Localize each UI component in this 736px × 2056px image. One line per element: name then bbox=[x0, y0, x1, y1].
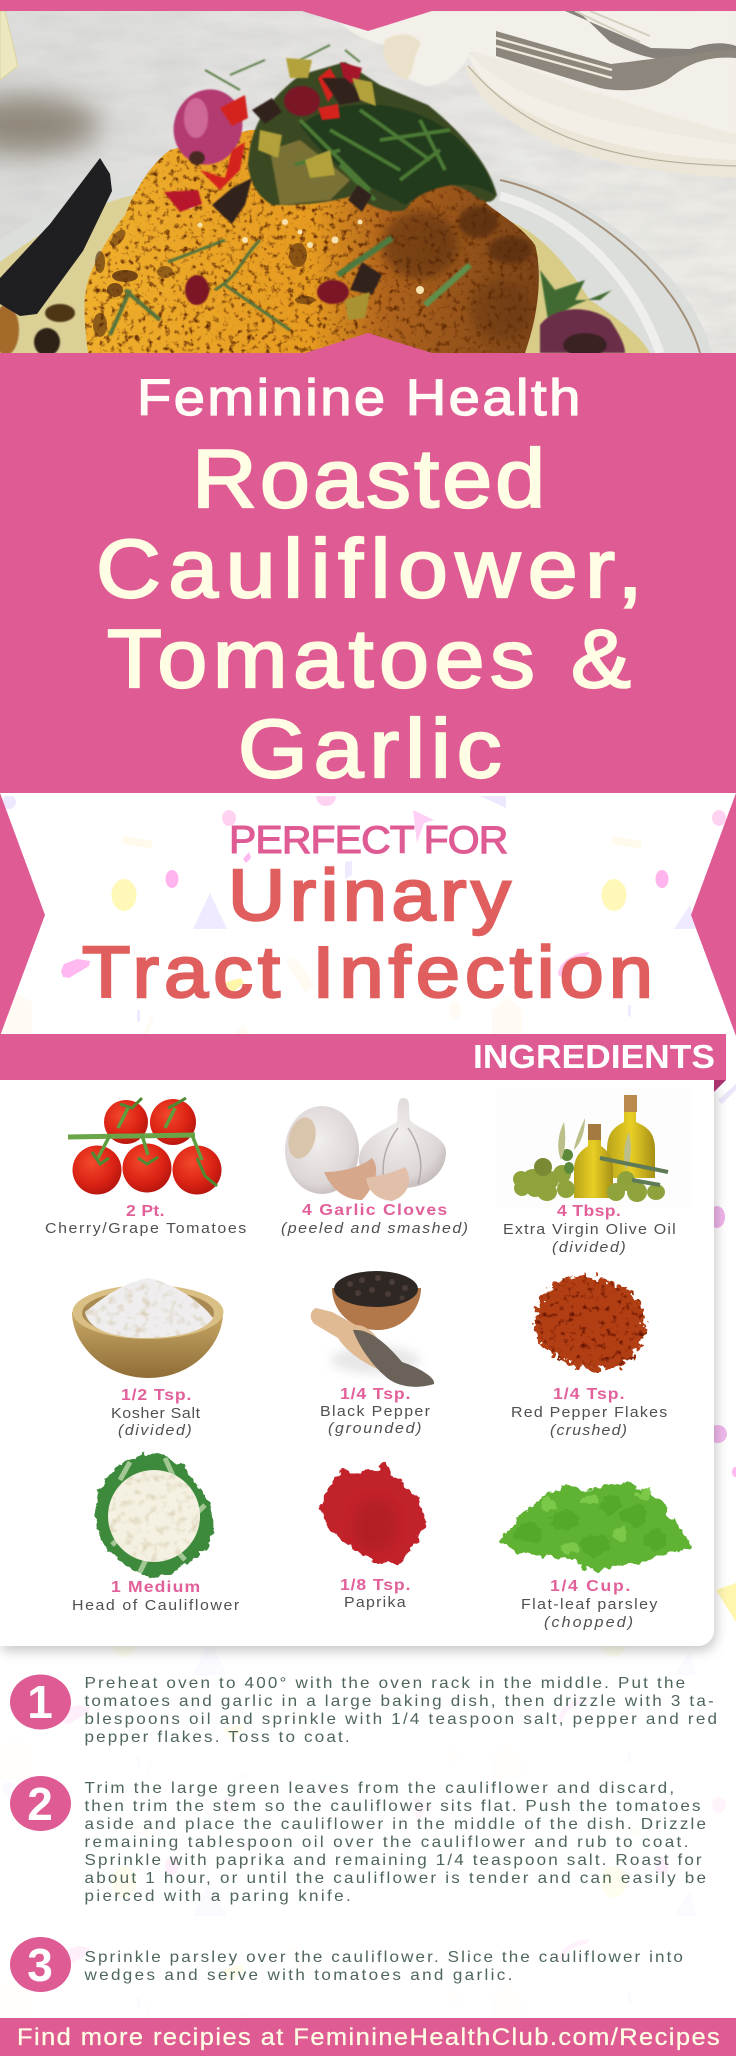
ingredients card bbox=[0, 1080, 714, 1646]
step 2 text: pierced with a paring knife. bbox=[84, 1888, 351, 1905]
red tomato and pomegranate pieces bbox=[164, 62, 362, 305]
icon: tomatoes bbox=[68, 1098, 222, 1194]
ingredient: black pepper: (grounded) bbox=[328, 1421, 422, 1437]
top pink band with notch bbox=[0, 0, 736, 31]
knife bbox=[0, 158, 112, 316]
icon: olive oil bottles and olives bbox=[497, 1088, 692, 1208]
title panel bbox=[0, 333, 736, 795]
ingredient: olive oil: (divided) bbox=[552, 1240, 626, 1256]
step number 3 bbox=[10, 1937, 71, 1992]
ingredient: kosher salt: (divided) bbox=[118, 1423, 192, 1439]
step 2 bbox=[10, 1776, 706, 1905]
ingredient: olive oil: Extra Virgin Olive Oil bbox=[503, 1222, 676, 1238]
herb and topping pile bbox=[205, 45, 497, 211]
garnish on right of plate bbox=[540, 270, 625, 357]
brand heading: Feminine Health bbox=[137, 369, 580, 426]
ingredient: red pepper flakes bbox=[511, 1277, 668, 1439]
banner: perfect for urinary tract infection bbox=[0, 793, 736, 1036]
step 1 text: blespoons oil and sprinkle with 1/4 teaspoon salt, pepper and red bbox=[84, 1711, 717, 1728]
forks bbox=[496, 11, 736, 90]
step 1 text: tomatoes and garlic in a large baking dish, then drizzle with 3 ta- bbox=[84, 1693, 714, 1710]
ingredient: garlic bbox=[281, 1098, 468, 1237]
ingredient: parsley: (chopped) bbox=[544, 1615, 633, 1631]
icon: pepper bowl and scoop bbox=[311, 1271, 434, 1387]
step number 1 bbox=[10, 1674, 71, 1730]
stacked plates bbox=[465, 50, 736, 178]
steps background confetti bbox=[62, 1646, 726, 1980]
right margin confetti bbox=[709, 1084, 736, 1622]
step 1 text: pepper flakes. Toss to coat. bbox=[84, 1729, 350, 1746]
ingredient: kosher salt: Kosher Salt bbox=[111, 1406, 201, 1422]
ingredient: kosher salt: 1/2 Tsp. bbox=[121, 1386, 191, 1404]
napkin bbox=[330, 11, 736, 134]
recipe title: Garlic bbox=[238, 703, 502, 795]
recipe title: Roasted bbox=[192, 433, 545, 525]
ingredient: black pepper bbox=[311, 1271, 434, 1437]
step number 1: 1 bbox=[27, 1676, 53, 1728]
icon: salt bowl bbox=[72, 1278, 224, 1378]
step 1 text: Preheat oven to 400° with the oven rack in the middle. Put the bbox=[84, 1675, 685, 1692]
ingredient: paprika: 1/8 Tsp. bbox=[340, 1576, 410, 1594]
dark olives bbox=[212, 78, 382, 295]
condition heading bbox=[82, 855, 653, 1013]
ingredient: garlic: (peeled and smashed) bbox=[281, 1221, 468, 1237]
glass jug edge bbox=[0, 11, 18, 80]
banner ribbon right cut bbox=[691, 793, 736, 1036]
recipe title bbox=[96, 433, 642, 795]
ingredient: red pepper flakes: (crushed) bbox=[550, 1423, 627, 1439]
hero photo: roasted cauliflower on a plate bbox=[0, 11, 736, 357]
ingredient: red pepper flakes: 1/4 Tsp. bbox=[553, 1385, 625, 1403]
icon: flat-leaf parsley bbox=[500, 1480, 690, 1570]
step 2 text: about 1 hour, or until the cauliflower is tender and can easily be bbox=[84, 1870, 706, 1887]
icon: paprika powder bbox=[320, 1464, 425, 1565]
ingredient: cauliflower: Head of Cauliflower bbox=[72, 1598, 239, 1614]
step 2 text: Trim the large green leaves from the cauliflower and discard, bbox=[84, 1780, 674, 1797]
ingredient: paprika: Paprika bbox=[344, 1595, 406, 1611]
ingredient: black pepper: Black Pepper bbox=[320, 1404, 430, 1420]
herb sprigs on cauliflower bbox=[110, 238, 470, 335]
cauliflower body bbox=[84, 125, 539, 353]
ingredient: parsley bbox=[500, 1480, 690, 1631]
ingredient: black pepper: 1/4 Tsp. bbox=[340, 1385, 410, 1403]
confetti pattern bbox=[0, 795, 726, 1034]
perfect for label: PERFECT FOR bbox=[229, 819, 508, 862]
step 2 text: aside and place the cauliflower in the middle of the dish. Drizzle bbox=[84, 1816, 706, 1833]
step 2 text bbox=[84, 1780, 706, 1905]
step 1 text bbox=[84, 1675, 717, 1746]
footer band bbox=[0, 2018, 736, 2056]
serving plate bbox=[0, 175, 712, 353]
step number 2 bbox=[10, 1776, 71, 1831]
icon: red pepper flakes bbox=[534, 1277, 645, 1370]
pickled red onion bbox=[172, 88, 244, 166]
ingredient: red pepper flakes: Red Pepper Flakes bbox=[511, 1405, 668, 1421]
ribbon fold bbox=[714, 1080, 726, 1092]
ingredient: olive oil bbox=[497, 1088, 692, 1256]
scorch marks bbox=[93, 206, 532, 340]
icon: cauliflower head bbox=[95, 1452, 214, 1578]
condition heading: Urinary bbox=[228, 855, 511, 936]
step number 2: 2 bbox=[27, 1778, 53, 1830]
bottom left garnish bbox=[0, 304, 75, 356]
ingredient: olive oil: 4 Tbsp. bbox=[557, 1202, 621, 1220]
step number 3: 3 bbox=[27, 1939, 53, 1991]
step 3 text: wedges and serve with tomatoes and garlic. bbox=[83, 1967, 512, 1984]
ingredient: paprika bbox=[320, 1464, 425, 1611]
banner ribbon left cut bbox=[0, 793, 45, 1036]
ingredient: garlic: 4 Garlic Cloves bbox=[302, 1201, 447, 1219]
step 3 text bbox=[83, 1949, 683, 1984]
step 2 text: remaining tablespoon oil over the cauliflower and rub to coat. bbox=[84, 1834, 688, 1851]
table shadow bbox=[0, 95, 100, 155]
step 2 text: Sprinkle with paprika and remaining 1/4 teaspoon salt. Roast for bbox=[84, 1852, 702, 1869]
condition heading: Tract Infection bbox=[82, 932, 653, 1013]
toasted crumbs bbox=[186, 201, 424, 294]
step 2 text: then trim the stem so the cauliflower sits flat. Push the tomatoes bbox=[84, 1798, 701, 1815]
ingredients heading band: INGREDIENTS bbox=[473, 1038, 715, 1075]
ingredient: kosher salt bbox=[72, 1278, 224, 1439]
step 3 bbox=[10, 1937, 683, 1992]
icon: garlic bbox=[284, 1098, 446, 1201]
ingredient: cauliflower bbox=[72, 1452, 239, 1614]
ingredient: cauliflower: 1 Medium bbox=[111, 1578, 200, 1596]
footer link text: Find more recipies at FeminineHealthClub.com/Recipes bbox=[17, 2025, 720, 2051]
recipe title: Tomatoes & bbox=[107, 613, 631, 705]
ingredient: parsley: 1/4 Cup. bbox=[550, 1577, 630, 1595]
step 1 bbox=[10, 1674, 717, 1746]
ingredients heading band bbox=[0, 1034, 726, 1092]
ingredient: parsley: Flat-leaf parsley bbox=[521, 1597, 658, 1613]
ingredient: tomatoes: Cherry/Grape Tomatoes bbox=[45, 1221, 247, 1237]
recipe title: Cauliflower, bbox=[96, 523, 642, 615]
pistachios bbox=[258, 58, 376, 320]
ingredient: tomatoes: 2 Pt. bbox=[126, 1202, 165, 1220]
ingredient: tomatoes bbox=[45, 1098, 247, 1237]
step 3 text: Sprinkle parsley over the cauliflower. Slice the cauliflower into bbox=[84, 1949, 683, 1966]
